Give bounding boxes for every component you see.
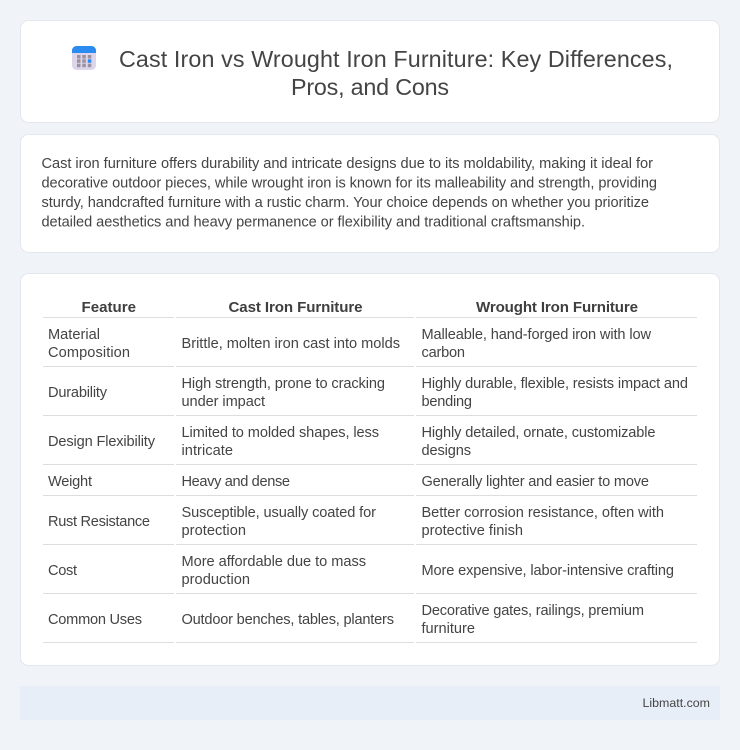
row: weight: Generally lighter and easier to move — [422, 474, 649, 490]
row: material composition: Composition — [48, 345, 130, 361]
row: material composition: Material — [48, 327, 100, 343]
row: cost: production — [182, 572, 250, 588]
row: cost — [43, 554, 697, 594]
intro text block: sturdy, handcrafted furniture with a rustic charm. Your choice depends on whether you prioritize — [42, 195, 649, 211]
panel: comparison table — [20, 274, 720, 666]
row: cost: Cost — [48, 563, 77, 579]
row: design flexibility: Highly detailed, ornate, customizable — [422, 425, 656, 441]
intro text block: decorative outdoor pieces, while wrought iron is known for its malleability and strength, providing — [42, 176, 657, 192]
row: durability: High strength, prone to cracking — [182, 376, 385, 392]
row: durability: Durability — [48, 385, 108, 401]
table header row — [43, 299, 697, 318]
title: Pros, and Cons — [291, 74, 449, 100]
intro text block: Cast iron furniture offers durability and intricate designs due to its moldability, making it ideal for — [42, 156, 653, 172]
row: weight: Weight — [48, 474, 92, 490]
row: common uses: Common Uses — [48, 612, 142, 628]
row: rust resistance: Better corrosion resistance, often with — [422, 505, 664, 521]
row: material composition: Brittle, molten iron cast into molds — [182, 336, 400, 352]
row: rust resistance: Rust Resistance — [48, 514, 150, 530]
row: durability: bending — [422, 394, 472, 410]
row: cost: More affordable due to mass — [182, 554, 366, 570]
row: common uses — [43, 603, 697, 643]
table header row: Cast Iron Furniture — [228, 299, 362, 316]
title — [119, 46, 673, 100]
row: common uses: Outdoor benches, tables, planters — [182, 612, 394, 628]
footer — [20, 686, 720, 720]
row: rust resistance: protective finish — [422, 523, 523, 539]
icon: calendar — [72, 46, 96, 70]
row: design flexibility: designs — [422, 443, 471, 459]
title: Cast Iron vs Wrought Iron Furniture: Key Differences, — [119, 46, 673, 72]
row: material composition — [43, 327, 697, 367]
row: durability: Highly durable, flexible, resists impact and — [422, 376, 688, 392]
panel: title card — [20, 20, 720, 122]
footer credit: Libmatt.com — [642, 696, 710, 710]
row: common uses: Decorative gates, railings, premium — [422, 603, 644, 619]
row: rust resistance: protection — [182, 523, 246, 539]
row: rust resistance: Susceptible, usually coated for — [182, 505, 376, 521]
row: weight — [43, 474, 697, 496]
row: design flexibility: Limited to molded shapes, less — [182, 425, 379, 441]
row: rust resistance — [43, 505, 697, 545]
row: material composition: carbon — [422, 345, 465, 361]
row: design flexibility: intricate — [182, 443, 233, 459]
table header row: Feature — [82, 299, 136, 316]
row: cost: More expensive, labor-intensive crafting — [422, 563, 674, 579]
panel: introduction — [20, 134, 720, 252]
row: common uses: furniture — [422, 621, 475, 637]
row: durability: under impact — [182, 394, 265, 410]
row: design flexibility — [43, 425, 697, 465]
row: material composition: Malleable, hand-forged iron with low — [422, 327, 651, 343]
row: weight: Heavy and dense — [182, 474, 290, 490]
table header row: Wrought Iron Furniture — [476, 299, 638, 316]
row: design flexibility: Design Flexibility — [48, 434, 156, 450]
row: durability — [43, 376, 697, 416]
intro text block: detailed aesthetics and heavy permanence or flexibility and traditional craftsmanship. — [42, 214, 585, 230]
intro text block — [42, 156, 657, 230]
